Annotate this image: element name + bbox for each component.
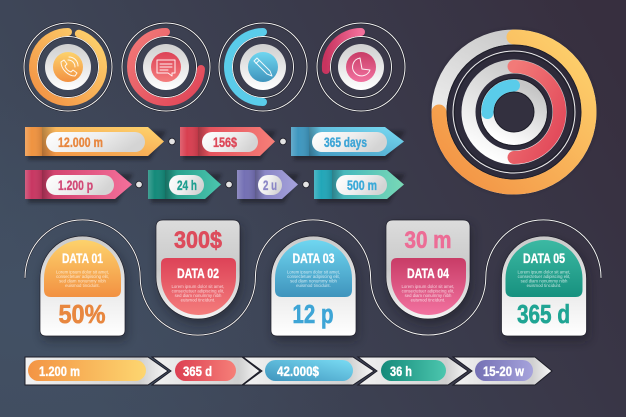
description text: sed diam nonummy nibh (175, 293, 222, 298)
description text: Lorem ipsum dolor sit amet, (401, 284, 455, 289)
description text: consectetuer adipiscing elit, (56, 274, 109, 279)
icon: speech bubble (157, 60, 175, 76)
description text: consectetuer adipiscing elit, (402, 288, 454, 294)
card: DATA 05: DATA 05 (523, 250, 565, 266)
description text: euismod tincidunt. (411, 298, 445, 302)
dot (280, 138, 286, 145)
chevron bar: 42.000$: 42.000$ (277, 363, 319, 379)
dot (303, 181, 309, 188)
description text: consectetuer adipiscing elit, (287, 274, 340, 279)
ribbon: 500 m: 500 m (347, 178, 377, 193)
description text: sed diam nonummy nibh (290, 278, 338, 284)
description text: euismod tincidunt. (65, 283, 100, 288)
chevron bar: 365 d: 365 d (183, 363, 212, 379)
description text: Lorem ipsum dolor sit amet, (56, 270, 109, 274)
middle red arc (514, 66, 560, 158)
chevron bar: 365 d (152, 357, 260, 385)
card: DATA 03: DATA 03 (292, 250, 335, 266)
card: DATA 04 (386, 220, 472, 324)
description text (56, 270, 109, 288)
chevron bar: 1.200 m (25, 357, 168, 385)
ring chart: pie (317, 23, 405, 111)
ribbon: 1.200 p: 1.200 p (58, 178, 93, 193)
card: DATA 04: DATA 04 (407, 265, 449, 281)
description text: sed diam nonummy nibh (521, 278, 568, 284)
dot (226, 181, 232, 188)
ribbon: 24 h (148, 170, 222, 203)
ribbon: 2 u: 2 u (263, 178, 277, 193)
large concentric ring chart (431, 29, 597, 195)
ribbon: 500 m (314, 170, 405, 203)
connecting wave line (25, 220, 601, 335)
dot (169, 138, 175, 145)
card: DATA 03 (271, 236, 358, 341)
outer orange arc (439, 37, 589, 187)
ring chart: phone (24, 23, 112, 111)
card: DATA 05 (502, 236, 588, 341)
card: DATA 02: 300$ (174, 227, 222, 254)
ring chart: pencil (219, 23, 307, 111)
ribbon: 1.200 p (25, 170, 133, 203)
ribbon: 365 days: 365 days (324, 135, 367, 150)
ribbon: 12.000 m: 12.000 m (58, 135, 103, 150)
description text: euismod tincidunt. (296, 283, 331, 288)
card: DATA 01 (40, 236, 127, 341)
description text: Lorem ipsum dolor sit amet, (287, 270, 340, 274)
value: 365 d (517, 301, 570, 329)
description text (287, 270, 340, 288)
description text: euismod tincidunt. (527, 283, 561, 288)
description text (517, 270, 571, 288)
inner blue arc (487, 85, 514, 113)
ribbon: 12.000 m (25, 127, 166, 160)
description text: sed diam nonummy nibh (59, 278, 107, 284)
dot (136, 181, 142, 188)
ribbon: 24 h: 24 h (177, 178, 197, 193)
value: 12 p (292, 301, 334, 329)
description text: Lorem ipsum dolor sit amet, (171, 284, 225, 289)
chevron bar: 36 h (358, 357, 468, 385)
icon: pencil (254, 58, 272, 76)
chevron bar: 42.000$ (243, 357, 374, 385)
description text (401, 284, 455, 302)
chevron bar: 15-20 w: 15-20 w (483, 363, 524, 379)
description text: consectetuer adipiscing elit, (172, 288, 224, 294)
ribbon: 156$ (180, 127, 276, 160)
card: DATA 02: DATA 02 (177, 265, 219, 281)
card: DATA 02 (156, 220, 242, 324)
description text: sed diam nonummy nibh (405, 293, 452, 298)
icon: phone (61, 57, 78, 76)
ribbon: 2 u (237, 170, 299, 203)
card: DATA 04: 30 m (404, 227, 452, 254)
ribbon: 156$: 156$ (213, 135, 237, 150)
chevron bar: 1.200 m: 1.200 m (39, 363, 80, 379)
ring chart: message (122, 23, 210, 111)
description text: consectetuer adipiscing elit, (518, 274, 570, 279)
icon: pie clock (353, 58, 370, 76)
description text: euismod tincidunt. (181, 298, 215, 302)
chevron bar: 36 h: 36 h (390, 363, 412, 379)
description text: Lorem ipsum dolor sit amet, (517, 270, 571, 274)
value: 50% (58, 301, 106, 329)
ribbon: 365 days (291, 127, 405, 160)
description text (171, 284, 225, 302)
chevron bar: 15-20 w (453, 357, 552, 385)
card: DATA 01: DATA 01 (62, 250, 103, 266)
